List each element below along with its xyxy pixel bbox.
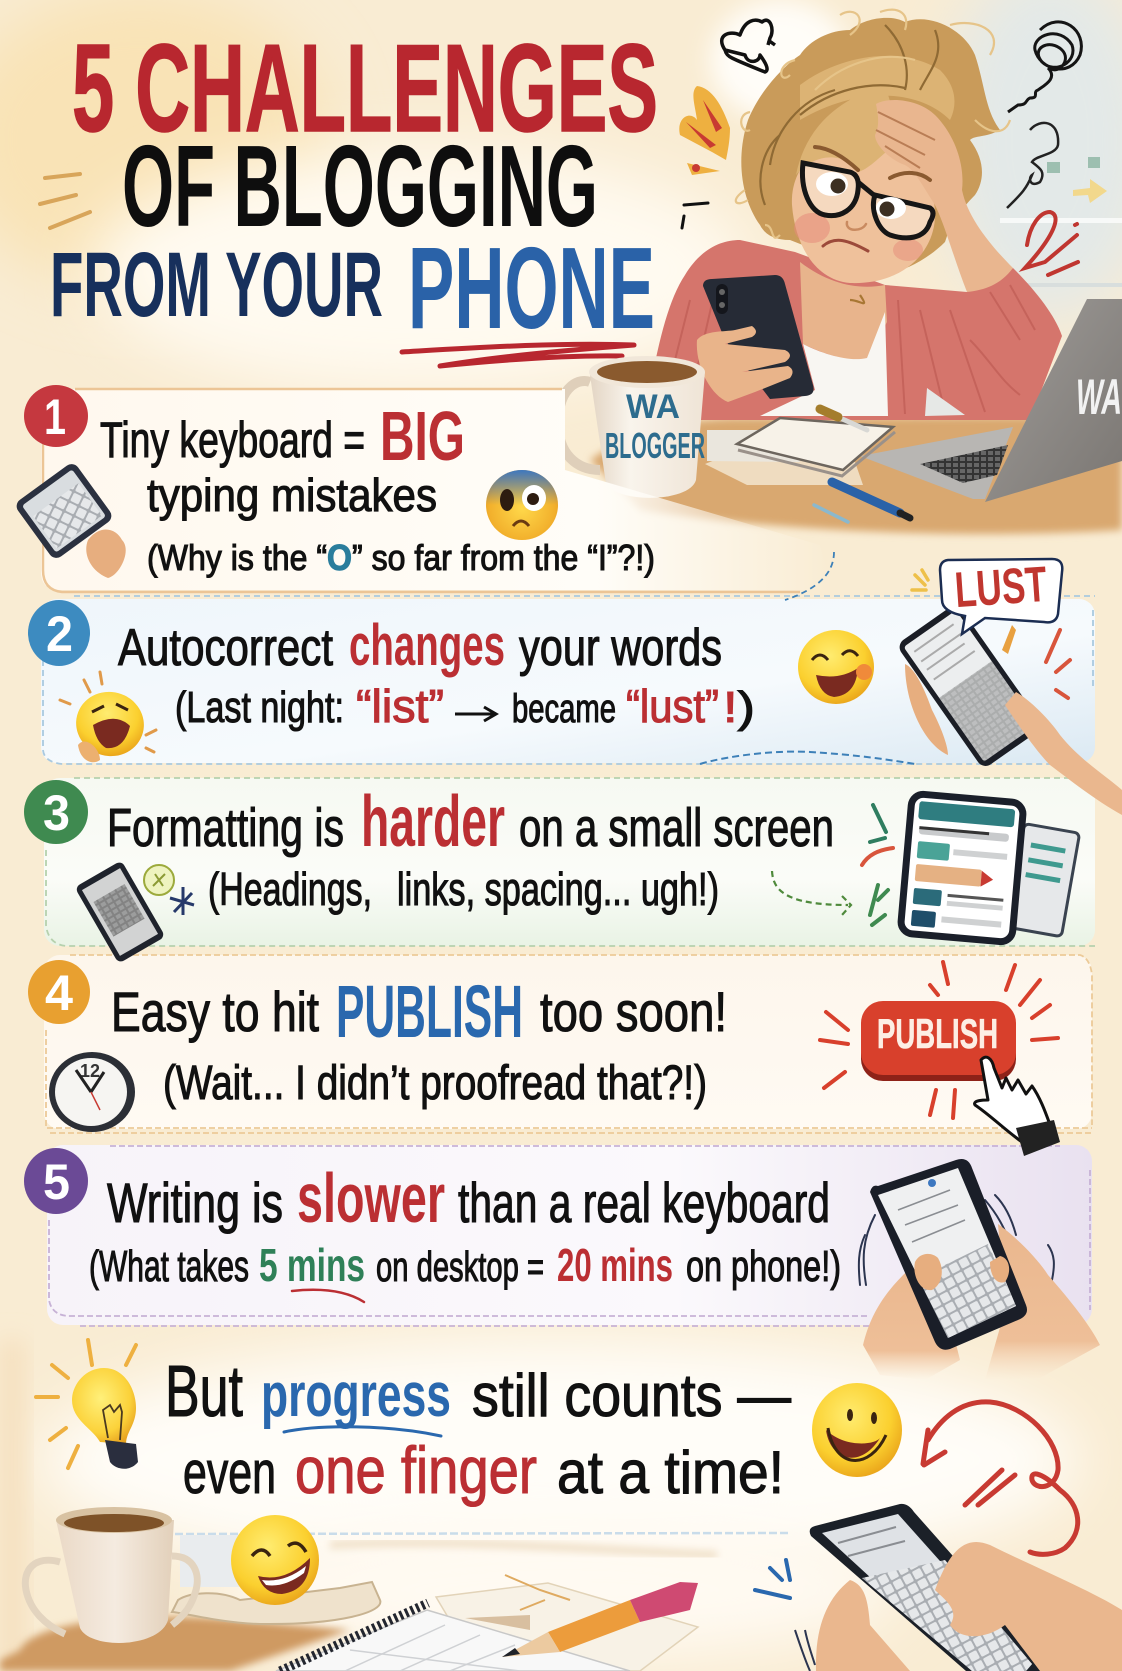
panel: challenge 1 <box>13 385 834 600</box>
notebook <box>705 409 895 485</box>
fingers <box>876 112 935 168</box>
heading 1: BIG <box>380 397 465 475</box>
badge 1 <box>24 385 88 447</box>
subtext 5: on desktop = <box>376 1243 544 1290</box>
icon: publish button with cursor <box>820 962 1060 1156</box>
bottom dashed line <box>175 1533 790 1534</box>
light gap under elbow <box>925 388 965 416</box>
heading 2 <box>118 613 722 678</box>
panel: challenge 4 <box>28 955 1092 1156</box>
closing line 2: even <box>183 1439 276 1506</box>
badge 2 <box>28 600 90 666</box>
wall behind emoji <box>180 1535 240 1587</box>
doodle: black ticks <box>682 203 708 228</box>
desk surface <box>590 416 1122 534</box>
heading 1 <box>100 397 465 521</box>
badge 5 <box>24 1148 88 1214</box>
screen <box>822 1514 1032 1671</box>
heading 3: on a small screen <box>519 798 834 858</box>
closing line 1 <box>165 1352 791 1436</box>
card 1 background <box>41 389 832 590</box>
closing line 1: progress <box>261 1361 451 1430</box>
blue pen <box>814 482 910 522</box>
bottom wood surface <box>0 1617 350 1671</box>
icon: formatted phone screen <box>900 793 1080 943</box>
subtext 2: !) <box>723 683 755 732</box>
icon: laughing emoji right <box>798 630 874 704</box>
laptop screen <box>985 299 1122 502</box>
subtext 5 <box>89 1239 841 1302</box>
subtext 1: (Why is the “O” so far from the “I”?!) <box>147 537 655 578</box>
icon: publish button with cursor: PUBLISH <box>877 1010 998 1057</box>
icon: notebook and pencil <box>276 1575 698 1671</box>
coffee mug: BLOGGER <box>605 425 705 466</box>
badge 1: 1 <box>44 389 66 445</box>
sweater knit <box>665 285 1035 414</box>
heading 5 <box>107 1159 830 1237</box>
icon: clock <box>49 1052 135 1132</box>
phone <box>810 1504 1045 1671</box>
heading 5: Writing is <box>107 1171 283 1234</box>
rays <box>820 962 1058 1118</box>
title line: of blogging: OF BLOGGING <box>122 121 598 251</box>
doodle: yellow and red burst <box>679 86 730 175</box>
title <box>50 20 658 366</box>
doodle: red stress marks <box>1025 212 1078 275</box>
icon: shocked emoji <box>486 470 558 540</box>
left hand <box>863 1263 960 1380</box>
pencil tip <box>502 1632 560 1657</box>
hand marks <box>755 1560 790 1598</box>
glasses <box>802 163 933 238</box>
panel: challenge 5 <box>24 1145 1100 1380</box>
cheek right <box>893 239 923 261</box>
heading 3: harder <box>361 782 505 862</box>
closing line 2: at a time! <box>557 1439 784 1506</box>
speech bubble <box>940 559 1062 634</box>
badge 4 <box>28 960 90 1024</box>
heading 4: Easy to hit <box>111 980 319 1043</box>
heading 2: changes <box>349 613 505 678</box>
closing line 1: But <box>165 1352 243 1432</box>
doodle: scribble cloud <box>722 20 775 72</box>
arrow: red curl <box>923 1402 1078 1554</box>
icon: hands typing with one finger <box>755 1504 1122 1671</box>
icon: smiley emoji <box>812 1383 902 1477</box>
badge 3 <box>24 780 88 844</box>
icon: grinning emoji <box>231 1515 319 1605</box>
subtext 5: on phone!) <box>686 1242 841 1291</box>
heading 4: too soon! <box>540 980 727 1043</box>
closing line 2 <box>183 1433 784 1507</box>
doodle: squiggle <box>1007 123 1058 208</box>
icon: laughing emoji left <box>60 672 156 764</box>
heading 2: your words <box>519 619 722 677</box>
eyes <box>816 172 906 219</box>
screen <box>878 1168 1016 1338</box>
sweater <box>645 240 1062 420</box>
arrow: dashed green <box>772 871 851 915</box>
title line: phone: PHONE <box>408 223 655 353</box>
illustration: stressed woman at desk <box>558 10 1122 534</box>
title line: 5 challenges: 5 CHALLENGES <box>72 20 658 158</box>
thumbs <box>914 1254 1009 1290</box>
subtext 5: 20 mins <box>557 1239 673 1291</box>
accents <box>1046 630 1070 698</box>
subtext 5: (What takes <box>89 1242 249 1291</box>
icon: light bulb <box>36 1340 138 1469</box>
white shirt <box>760 312 888 416</box>
laptop keys <box>920 445 1008 483</box>
subtext 2 <box>175 680 755 732</box>
card 4 background <box>44 955 1092 1129</box>
left hand <box>816 1580 910 1671</box>
pencil body <box>548 1600 640 1652</box>
subtext 2: “lust” <box>626 680 719 732</box>
icon: small phone with markers <box>75 860 194 964</box>
coffee mug: WA <box>626 388 680 426</box>
subtext 3: links, spacing... ugh!) <box>397 863 719 915</box>
icon: clock: 12 <box>80 1061 100 1081</box>
arrow <box>455 707 496 721</box>
card 3 background <box>44 778 1095 946</box>
coffee mug <box>558 356 705 498</box>
heading 5: slower <box>297 1159 445 1237</box>
red underline <box>292 1290 364 1302</box>
icon: phone with lust bubble: LUST <box>953 556 1049 618</box>
badge 5: 5 <box>43 1154 70 1210</box>
icon: coffee cup <box>25 1507 197 1643</box>
right hand with pointing finger <box>1005 692 1122 815</box>
heading 1: typing mistakes <box>147 469 437 521</box>
subtext 2: “list” <box>356 680 444 732</box>
left hand <box>905 664 948 755</box>
accents around phone <box>862 805 893 925</box>
icon: two hands typing on phone <box>859 1159 1100 1380</box>
subtext 3 <box>208 863 719 915</box>
shake marks <box>859 1195 1054 1285</box>
heading 3: Formatting is <box>107 798 344 858</box>
keyboard <box>918 1244 1016 1338</box>
eyebrows, nose and mouth <box>815 147 930 251</box>
heading 4 <box>111 970 727 1053</box>
title underline scribble <box>402 344 634 366</box>
forearm and hand on head <box>875 100 1013 292</box>
saucer <box>172 1582 380 1624</box>
subtext 3: (Headings, <box>208 863 372 915</box>
title line: from your: FROM YOUR <box>50 234 383 336</box>
heading 5: than a real keyboard <box>458 1171 830 1234</box>
heading 2: Autocorrect <box>118 619 333 677</box>
face <box>792 135 935 283</box>
badge 2: 2 <box>46 606 73 662</box>
badge 3: 3 <box>43 785 70 841</box>
pencil eraser <box>630 1582 698 1622</box>
keyboard <box>862 1560 1032 1671</box>
subtext 4: (Wait... I didn’t proofread that?!) <box>163 1057 707 1110</box>
hair fringe <box>796 56 954 175</box>
laptop base <box>860 427 1013 499</box>
phone <box>870 1159 1027 1350</box>
title accent dashes <box>40 174 90 228</box>
icon: phone with lust bubble <box>896 556 1122 815</box>
subtext 2: (Last night: <box>175 683 344 732</box>
panel: challenge 3 <box>24 778 1095 964</box>
right hand <box>935 1542 1122 1671</box>
subtext 2: became <box>512 687 616 731</box>
closing message <box>165 1352 791 1507</box>
hair strands <box>760 25 938 205</box>
closing line 2: one finger <box>295 1433 537 1507</box>
badge 4: 4 <box>45 965 73 1021</box>
closing line 1: still counts — <box>472 1362 791 1429</box>
hand cursor <box>975 1057 1052 1142</box>
doodle: tangled spiral <box>1008 22 1081 112</box>
subtext 5: 5 mins <box>259 1239 365 1291</box>
icon: tiny keyboard phone <box>13 461 126 578</box>
heading 3 <box>107 782 834 862</box>
panel: challenge 2 <box>28 556 1122 815</box>
cheek left <box>794 213 830 243</box>
phone held by woman <box>703 275 814 399</box>
hair mass <box>741 18 1000 276</box>
card 5 background <box>47 1145 1092 1325</box>
heading 4: PUBLISH <box>336 970 523 1053</box>
hand holding phone <box>697 326 793 402</box>
right hand <box>985 1224 1100 1380</box>
heading 1: Tiny keyboard = <box>100 412 365 468</box>
hair highlights and flyaways <box>736 10 1010 303</box>
card 2 background <box>41 599 1095 763</box>
neck and chest <box>800 262 887 360</box>
